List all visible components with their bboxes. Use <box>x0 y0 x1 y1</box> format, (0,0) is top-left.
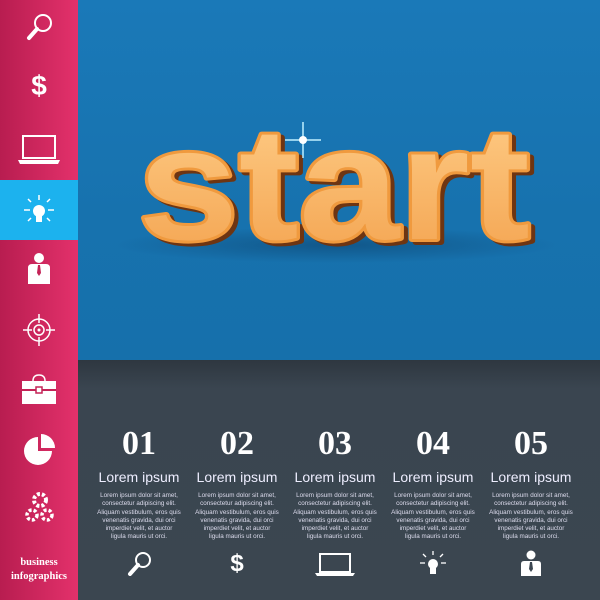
icon: person <box>28 253 50 284</box>
column 03: Lorem ipsum dolor sit amet, <box>296 492 374 499</box>
icon: laptop <box>18 135 60 164</box>
column 03: consectetur adipiscing elit. <box>298 500 372 507</box>
column 04: imperdiet velit, et auctor <box>400 525 466 532</box>
column 03: imperdiet velit, et auctor <box>302 525 368 532</box>
column 01: Aliquam vestibulum, eros quis <box>97 509 181 516</box>
column 02: ligula mauris ut orci. <box>209 533 265 540</box>
icon: magnifier <box>128 552 151 576</box>
column 02: Lorem ipsum dolor sit amet, <box>198 492 276 499</box>
title: start 3D: start <box>142 97 534 276</box>
column 01: 01 <box>122 425 156 462</box>
column 01: imperdiet velit, et auctor <box>106 525 172 532</box>
column 03: 03 <box>318 425 352 462</box>
icon: laptop <box>315 553 355 576</box>
column 04: Aliquam vestibulum, eros quis <box>391 509 475 516</box>
column 03: Aliquam vestibulum, eros quis <box>293 509 377 516</box>
column 02: 02 <box>220 425 254 462</box>
icon: briefcase <box>22 374 56 404</box>
icon: bulb <box>420 551 446 574</box>
column 04 <box>391 425 475 574</box>
highlighted band <box>0 180 78 240</box>
column 03: venenatis gravida, dui orci <box>298 517 372 524</box>
column 05: consectetur adipiscing elit. <box>494 500 568 507</box>
column 01: Lorem ipsum dolor sit amet, <box>100 492 178 499</box>
sidebar caption <box>11 557 67 582</box>
sidebar caption: business <box>20 557 58 568</box>
column 05: venenatis gravida, dui orci <box>494 517 568 524</box>
icon: bulb <box>24 195 54 222</box>
icon: target <box>23 314 55 346</box>
icon: pie chart <box>24 434 55 465</box>
top blue panel <box>78 0 600 360</box>
icon: dollar: $ <box>31 70 47 101</box>
column 02: venenatis gravida, dui orci <box>200 517 274 524</box>
column 04: Lorem ipsum dolor sit amet, <box>394 492 472 499</box>
sidebar caption: infographics <box>11 571 67 582</box>
column 05: ligula mauris ut orci. <box>503 533 559 540</box>
column 02 <box>195 425 279 577</box>
column 05: 05 <box>514 425 548 462</box>
title: start 3D: start <box>138 94 530 273</box>
title: start 3D: start <box>138 94 530 273</box>
column 03: Lorem ipsum <box>295 469 375 485</box>
column 02: Lorem ipsum <box>197 469 277 485</box>
column 02: imperdiet velit, et auctor <box>204 525 270 532</box>
sidebar <box>0 0 78 600</box>
column 02: Aliquam vestibulum, eros quis <box>195 509 279 516</box>
column 05: Lorem ipsum <box>491 469 571 485</box>
column 05: imperdiet velit, et auctor <box>498 525 564 532</box>
column 04: Lorem ipsum <box>393 469 473 485</box>
column 03 <box>293 425 377 576</box>
column 05 <box>489 425 573 576</box>
icon: person <box>521 550 541 576</box>
column 04: ligula mauris ut orci. <box>405 533 461 540</box>
bottom dark panel <box>78 360 600 600</box>
icon: magnifier <box>26 14 52 40</box>
column 05: Lorem ipsum dolor sit amet, <box>492 492 570 499</box>
column 01: ligula mauris ut orci. <box>111 533 167 540</box>
column 01: Lorem ipsum <box>99 469 179 485</box>
column 02: consectetur adipiscing elit. <box>200 500 274 507</box>
column 04: consectetur adipiscing elit. <box>396 500 470 507</box>
icon: gears <box>25 492 54 522</box>
column 03: ligula mauris ut orci. <box>307 533 363 540</box>
column 01: consectetur adipiscing elit. <box>102 500 176 507</box>
column 01: venenatis gravida, dui orci <box>102 517 176 524</box>
column 04: 04 <box>416 425 450 462</box>
column 04: venenatis gravida, dui orci <box>396 517 470 524</box>
column 05: Aliquam vestibulum, eros quis <box>489 509 573 516</box>
column 01 <box>97 425 181 576</box>
icon: dollar: $ <box>230 550 244 577</box>
